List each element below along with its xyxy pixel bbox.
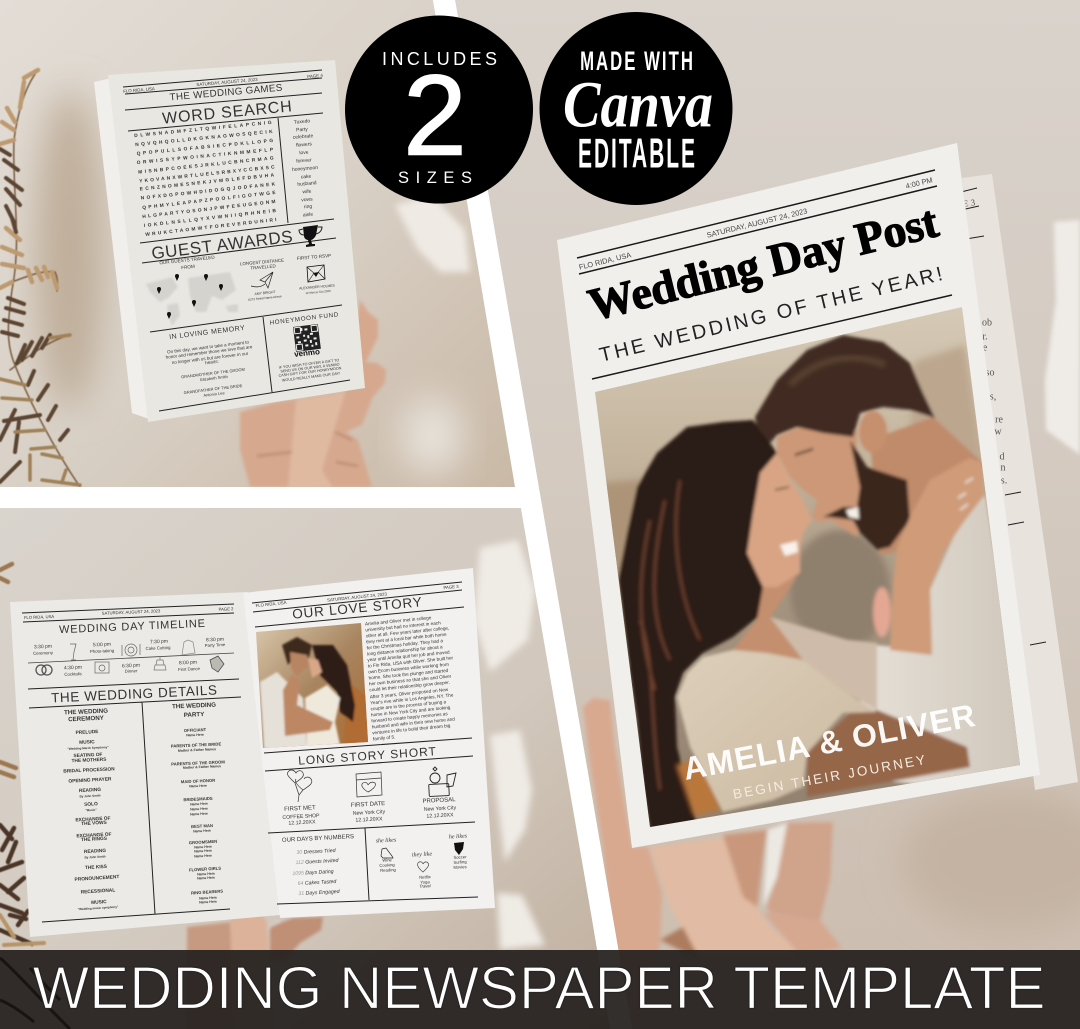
badge: includes 2 sizes — [345, 16, 533, 204]
text block: love story paragraph: home in New York City and are looking — [371, 705, 451, 717]
likes: she likes: Wine — [382, 857, 393, 863]
text block: love story paragraph: Amelia and Oliver met in college — [365, 615, 432, 626]
back page of the newspaper: so — [986, 368, 994, 378]
column: The Wedding Party: RING BEARERS — [191, 889, 223, 895]
column: The Wedding Party: OFFICIANT — [184, 727, 207, 733]
column: The Wedding Ceremony: READING — [84, 848, 106, 855]
text block: love story paragraph: couple are in the process of buying a — [370, 699, 447, 711]
timeline: 5:00 pm — [93, 642, 111, 648]
milestone: first met: 12.12.20XX — [288, 819, 316, 827]
column: The Wedding Ceremony: RECESSIONAL — [80, 887, 116, 896]
award: longest distance: 8273 Street Name Above — [248, 294, 282, 302]
column: The Wedding Ceremony: PRONOUNCEMENT — [74, 874, 120, 883]
newspaper page: The Wedding Games — [94, 60, 365, 422]
panel: top-left photo backdrop — [0, 0, 520, 490]
text block: love story paragraph: university but had no interest in each — [365, 620, 441, 632]
column: The Wedding Party: PARENTS OF THE BRIDE — [171, 741, 221, 749]
text block: love story paragraph: Year's eve while in Los Angeles, NY. The — [370, 692, 454, 705]
text block: In Loving Memory: On this day, we want to take a moment to — [167, 339, 250, 355]
man's ear — [859, 411, 887, 453]
man's shirt — [860, 495, 1030, 790]
list: Our Days By Numbers: 112 Guests Invited — [295, 858, 340, 866]
orange sunlit hair patch — [676, 758, 722, 816]
icon: hearts — [418, 862, 429, 872]
column: The Wedding Party: Name Here — [199, 895, 217, 901]
timeline — [28, 637, 234, 677]
column: The Wedding Party: Name Here — [194, 849, 212, 853]
column: The Wedding Ceremony — [63, 708, 120, 911]
milestone: proposal: 12.12.20XX — [426, 812, 454, 820]
column: The Wedding Ceremony: "Wedding March Symphony" — [67, 745, 109, 751]
timeline: 8:30 pm — [206, 637, 224, 643]
list: Our Days By Numbers: 1095 Days Dating — [292, 869, 334, 877]
milestone: first met: COFFEE SHOP — [282, 813, 320, 821]
milestone: proposal — [422, 767, 457, 820]
column: The Wedding Party: Name Here — [197, 871, 215, 877]
badge: made with Canva, editable: MADE WITH — [580, 46, 693, 76]
award: longest distance: AMY BRIGHT — [254, 290, 276, 296]
masthead: Wedding Day Post: Wedding Day Post — [583, 195, 944, 330]
column: The Wedding Ceremony: THE KISS — [85, 864, 108, 871]
back page of the newspaper: d — [1000, 452, 1004, 462]
hand holding main page — [582, 696, 842, 950]
text block: Honeymoon Fund: venmo — [294, 347, 320, 359]
word list — [292, 118, 318, 218]
text block: Honeymoon Fund: SEND US ON OUR WAY, A VENMO — [280, 362, 340, 374]
word list: flowers — [296, 141, 313, 149]
heading: Wedding Day Timeline: WEDDING DAY TIMELINE — [59, 618, 205, 636]
timeline: Cocktails — [64, 671, 82, 677]
word search grid: WRUKCTAOMWTFOREVERDUNIRI — [145, 217, 278, 238]
newspaper spread: left page (timeline and details) — [10, 592, 280, 937]
word search grid: YKOVANXWRTLUELSRBXYCCBXSC — [139, 164, 275, 185]
photo: couple forehead to forehead — [590, 300, 1030, 840]
icon: high heel — [381, 848, 393, 858]
text block: love story paragraph: own Ecom business while working from — [368, 662, 449, 674]
column: The Wedding Party: BEST MAN — [191, 823, 213, 829]
icon: envelope — [307, 265, 325, 282]
timeline: 6:30 pm — [122, 663, 140, 669]
text block: In Loving Memory: Antonio Lee — [203, 390, 226, 398]
column: The Wedding Party: Name Here — [186, 733, 204, 737]
man's forearm — [807, 710, 970, 797]
text block: In Loving Memory: honor and remember those we love that are — [165, 344, 253, 360]
word search grid: IOKDLNSLLQYXVWNIIQRHNEIB — [144, 208, 277, 229]
hand holding top-left page — [240, 300, 386, 487]
icon: trophy — [299, 225, 322, 247]
column: The Wedding Ceremony: "Music" — [85, 808, 97, 812]
white divider bands — [0, 0, 632, 1029]
timeline: First Dance — [178, 666, 201, 672]
back page of the newspaper: r. — [982, 332, 988, 342]
word list: celebrate — [292, 133, 314, 141]
word search grid: QPOPULLSOFABSIECPDKLLOPG — [136, 138, 274, 157]
column: The Wedding Ceremony: MUSIC — [91, 899, 107, 906]
icon: tuxedo — [454, 842, 464, 855]
column: The Wedding Ceremony: THE MOTHERS — [71, 757, 107, 764]
column: The Wedding Ceremony: READING — [79, 787, 101, 794]
likes: story likes: Netflix — [419, 874, 432, 880]
text block: In Loving Memory: GRANDMOTHER OF THE GROOM — [181, 367, 245, 379]
text block: love story paragraph: forward to create happy memories as — [371, 711, 449, 723]
text block: In Loving Memory: hearts: — [205, 359, 219, 365]
word list: honeymoon — [292, 165, 318, 173]
text block: In Loving Memory — [165, 325, 253, 398]
award: longest distance — [240, 258, 284, 302]
page header: SATURDAY, AUGUST 24, 2023 — [706, 206, 808, 240]
word list: Tuxedo — [294, 118, 311, 126]
word search grid: ECNZNOMESNEKJVMGLEFDBVHA — [140, 172, 275, 193]
page header — [123, 70, 350, 411]
likes: she likes: Cooking — [379, 862, 395, 868]
word list: wife — [302, 189, 312, 195]
text block: love story paragraph: long distance relationship for about a — [367, 644, 443, 656]
back page of the newspaper: s, — [990, 392, 996, 402]
woman's hair — [618, 420, 777, 830]
award: first to RSVP: ALEXANDER HOLMES — [299, 283, 336, 291]
panel: bottom-left photo backdrop — [0, 508, 597, 950]
column: The Wedding Ceremony: THE VOWS — [81, 820, 108, 827]
page header: FLO RIDA, USA — [255, 600, 287, 608]
column: The Wedding Party: Name Here — [190, 812, 208, 816]
heading: The Wedding Details: THE WEDDING DETAILS — [51, 682, 217, 706]
column: The Wedding Party: Mother & Father Names — [183, 764, 221, 770]
photo: couple embracing — [256, 623, 368, 748]
main newspaper front page — [557, 143, 1040, 848]
woman's sweater — [677, 650, 877, 812]
woman's hand and arm — [890, 458, 983, 655]
man's face — [777, 428, 867, 537]
icon: heart balloons — [287, 770, 312, 802]
page header: PAGE 3 — [443, 584, 459, 590]
milestone: first date — [351, 772, 386, 824]
likes: he likes: Movies — [453, 864, 467, 870]
award: longest distance: LONGEST DISTANCE — [240, 258, 284, 266]
milestone: first date: 12.12.20XX — [355, 816, 383, 824]
hand holding spread — [186, 916, 324, 950]
text block: love story paragraph: other at all. Few years later after college, — [366, 625, 449, 638]
column: The Wedding Ceremony: OPENING PRAYER — [68, 776, 112, 785]
text block: love story paragraph: to Flo Rida, USA with Oliver. She built her — [368, 655, 454, 668]
column: The Wedding Party — [171, 702, 225, 905]
woman's blouse — [770, 617, 877, 710]
text block: Honeymoon Fund: IF YOU WISH TO OFFER A GIFT TO — [279, 358, 340, 370]
likes: she likes: she likes — [376, 837, 397, 845]
text block: love story paragraph: home. She took the plunge and started — [368, 668, 449, 680]
badge: includes 2 sizes: 2 — [403, 52, 467, 180]
column: The Wedding Ceremony: THE WEDDING — [64, 708, 108, 716]
column: The Wedding Ceremony: EXCHANGE OF — [75, 816, 111, 823]
likes: story likes: Travel — [419, 883, 432, 889]
footer title: WEDDING NEWSPAPER TEMPLATE — [32, 954, 1046, 1022]
text block: love story paragraph: After 3 years, Oliver proposed on New — [370, 687, 449, 699]
list: Our Days By Numbers: OUR DAYS BY NUMBERS — [282, 834, 354, 844]
likes: story likes: they like — [412, 851, 433, 859]
award: first to RSVP: 12 Mercer Dal 2020 — [305, 289, 331, 295]
plant: dried fern top-left — [0, 70, 80, 487]
text block: Honeymoon Fund — [269, 311, 342, 383]
heading: Long Story Short: LONG STORY SHORT — [298, 744, 437, 768]
fabric edge on the right — [1045, 220, 1080, 455]
list: Our Days By Numbers: 31 Days Engaged — [298, 889, 341, 897]
word search grid: NQVQHQOLLDKGKNAGWOSQECIK — [135, 129, 273, 148]
timeline icons — [36, 640, 224, 675]
text block: love story paragraph: for the Christmas holiday. They had a — [366, 638, 444, 650]
page header — [252, 582, 478, 904]
badge: made with Canva, editable — [540, 12, 732, 205]
award: first to RSVP — [297, 253, 336, 295]
back page of the newspaper: re — [995, 414, 1003, 426]
award: first to RSVP: FIRST TO RSVP — [297, 253, 331, 261]
photo caption: names: AMELIA & OLIVER — [680, 697, 978, 787]
page header: 4:00 PM — [905, 175, 933, 191]
heading: Guest Awards: GUEST AWARDS — [150, 227, 294, 263]
headline: THE WEDDING OF THE YEAR! — [597, 263, 945, 367]
column: The Wedding Ceremony: By John Smith — [79, 793, 101, 799]
timeline: Photo-taking — [90, 648, 115, 654]
page header — [22, 604, 241, 922]
column: The Wedding Ceremony: "Wedding music symphony" — [78, 905, 119, 911]
likes: he likes: Soccer — [453, 854, 467, 860]
text block: In Loving Memory: IN LOVING MEMORY — [169, 325, 245, 341]
milestone: first met — [282, 770, 320, 827]
column: The Wedding Party: PARTY — [184, 711, 205, 719]
world map — [146, 272, 238, 326]
column: The Wedding Ceremony: BRIDAL PROCESSION — [63, 766, 115, 775]
text block: Honeymoon Fund: HONEYMOON FUND — [269, 311, 339, 327]
likes: she likes — [376, 837, 397, 873]
man's hair — [755, 335, 935, 443]
column: The Wedding Ceremony: THE RINGS — [81, 836, 108, 843]
timeline: 8:00 pm — [179, 660, 197, 666]
word search grid: HLGPARTYOSONJPWFEEUGEONM — [142, 199, 276, 220]
column: The Wedding Ceremony: SEATING OF — [73, 752, 103, 759]
word list: aisle — [303, 212, 314, 218]
text block: love story paragraph: family of 5. — [373, 734, 396, 741]
column: The Wedding Party: THE WEDDING — [172, 702, 216, 710]
column: The Wedding Party: Name Here — [193, 829, 211, 833]
award: longest distance: TRAVELLED — [250, 263, 276, 271]
text block: love story paragraph: her own business so that she and Oliver — [369, 674, 452, 686]
list: Our Days By Numbers — [282, 834, 354, 897]
text block: Honeymoon Fund: WOULD REALLY MAKE OUR DAY! — [282, 371, 340, 383]
text block: love story paragraph: year until Amelia quit her job and moved — [367, 650, 450, 662]
text block: love story paragraph: could let their relationship grow deeper. — [369, 680, 450, 692]
milestone: proposal: PROPOSAL — [422, 797, 456, 805]
page header: FLO RIDA, USA — [578, 250, 632, 272]
panel: right photo backdrop — [450, 0, 1080, 1029]
man's neck — [870, 417, 985, 555]
likes: she likes: Reading — [380, 867, 397, 873]
wall and soft backdrop — [907, 344, 988, 568]
badge: includes 2 sizes: SIZES — [398, 169, 472, 187]
column: The Wedding Ceremony: CEREMONY — [68, 715, 105, 723]
pink shoulder patch — [873, 587, 891, 637]
heading: Our Love Story: OUR LOVE STORY — [292, 594, 422, 622]
footer banner — [0, 950, 1080, 1029]
page header: PAGE 4 — [307, 73, 324, 79]
likes: story likes: Yoga — [420, 879, 430, 885]
column: The Wedding Party: Name Here — [190, 807, 208, 811]
page header: SATURDAY, AUGUST 24, 2023 — [102, 608, 161, 616]
word list: forever — [296, 157, 312, 165]
word list: husband — [297, 180, 317, 188]
column: The Wedding Party: PARENTS OF THE GROOM — [171, 759, 225, 767]
woman's neck — [733, 577, 805, 660]
icon: ring box — [429, 767, 456, 797]
page header: FLO RIDA, USA — [24, 614, 54, 620]
text block: In Loving Memory: GRANDFATHER OF THE BRIDE — [183, 383, 243, 395]
column: The Wedding Ceremony: PRELUDE — [75, 729, 99, 736]
word list: love — [299, 150, 309, 156]
text block: love story paragraph: husband and wife in their new home and — [372, 716, 455, 729]
timeline: 3:30 pm — [34, 644, 52, 650]
heading: Word Search: WORD SEARCH — [161, 98, 293, 128]
text block: In Loving Memory: Elizabeth Smith — [200, 374, 228, 382]
column: The Wedding Party: Name Here — [189, 784, 207, 788]
word search grid: ORWISSYPWOINACTIKNMMEFLP — [136, 147, 274, 166]
word search grid — [134, 120, 278, 238]
back page of the newspaper: s. — [1001, 476, 1007, 486]
text block: love story paragraph: they met at a local bar while both home — [366, 632, 447, 644]
heading: The Wedding Games: THE WEDDING GAMES — [169, 83, 283, 103]
text block: In Loving Memory: no longer with us but are forever in our — [171, 351, 249, 365]
woman's face — [747, 453, 812, 587]
torn ribbon: top — [395, 195, 470, 272]
back page of the newspaper: ob — [982, 318, 992, 328]
text block: Honeymoon Fund: CASH GIFT FOR OUR HONEYMOON — [278, 366, 342, 378]
timeline: Dinner — [125, 668, 138, 674]
back page of the newspaper: e — [983, 342, 988, 354]
word search grid: QPHMYLEAPAPZPOOLFIGOTWGE — [142, 190, 277, 211]
word search grid: DLWSNADMFZLTQWIFELAPCNIG — [134, 120, 272, 139]
timeline: Cake Cutting — [145, 645, 171, 651]
plant: dried foliage bottom-left — [0, 564, 44, 945]
torn ribbons: bottom-left — [474, 540, 545, 950]
badge: includes 2 sizes: INCLUDES — [382, 49, 497, 69]
timeline: Party Time — [205, 642, 226, 648]
likes: story likes — [412, 851, 433, 889]
milestone: first met: FIRST MET — [284, 805, 316, 813]
word list: vows — [301, 196, 313, 203]
column: The Wedding Party: Name Here — [194, 845, 212, 849]
milestone: first date: FIRST DATE — [351, 801, 385, 809]
column: The Wedding Ceremony: SOLO — [84, 801, 98, 808]
word list: Party — [296, 126, 309, 133]
back page of the newspaper: w — [994, 426, 1002, 438]
likes: he likes: Surfing — [453, 859, 467, 865]
back page of the newspaper — [961, 174, 1078, 790]
page header: PAGE 2 — [218, 606, 234, 612]
column: The Wedding Party: Name Here — [190, 802, 208, 806]
icon: paper airplane — [251, 272, 273, 288]
column: The Wedding Party: Name Here — [199, 899, 217, 905]
word search grid: MISNBPCOEESJRKLUCBNCRMAG — [138, 155, 274, 176]
word list: ring — [304, 204, 313, 210]
column: The Wedding Ceremony: MUSIC — [79, 739, 95, 746]
milestone: first date: New York City — [353, 809, 386, 817]
timeline: 7:30 pm — [150, 639, 168, 645]
column: The Wedding Party: BRIDESMAIDS — [183, 796, 213, 802]
timeline: 4:30 pm — [64, 665, 82, 671]
back page of the newspaper: E 3 — [962, 197, 976, 209]
text block: love story paragraph — [365, 615, 455, 741]
column: The Wedding Ceremony: By John Smith — [84, 854, 106, 860]
likes: he likes — [449, 833, 468, 870]
text block: love story paragraph: ventures in life to build their dream big — [372, 723, 451, 735]
icon: calendar — [356, 772, 382, 797]
column: The Wedding Ceremony: EXCHANGE OF — [76, 832, 112, 839]
man's beard — [823, 440, 910, 550]
photo caption: tagline: BEGIN THEIR JOURNEY — [732, 752, 926, 802]
newspaper spread: right page (love story) — [243, 568, 495, 918]
list: Our Days By Numbers: 64 Cakes Tasted — [297, 879, 338, 887]
award: guests traveled: OUR GUESTS TRAVELED — [159, 255, 216, 265]
column: The Wedding Party: MAID OF HONOR — [181, 778, 215, 784]
column: The Wedding Party: GROOMSMEN — [189, 839, 217, 845]
award: guests traveled — [146, 255, 238, 326]
QR code — [293, 324, 321, 352]
word search grid: NOFXDGPOWHDIDOGQJODFANEK — [141, 181, 276, 202]
column: The Wedding Party: Mother & Father Names — [178, 747, 216, 753]
page header — [577, 170, 952, 379]
map pins — [157, 274, 223, 319]
milestone: proposal: New York City — [424, 805, 457, 813]
back page of the newspaper: n — [1000, 462, 1006, 474]
page header: SATURDAY, AUGUST 24, 2023 — [196, 77, 258, 87]
timeline: Ceremony — [33, 650, 54, 656]
column: The Wedding Party: FLOWER GIRLS — [189, 866, 221, 872]
award: guests traveled: FROM — [181, 264, 195, 270]
column: The Wedding Party: Name Here — [194, 854, 212, 858]
word list: cake — [300, 174, 312, 180]
badge: made with Canva, editable: EDITABLE — [578, 131, 695, 177]
badge: made with Canva, editable: Canva — [563, 68, 713, 142]
list: Our Days By Numbers: 30 Dresses Tried — [296, 848, 337, 856]
column: The Wedding Party: Name Here — [197, 875, 215, 881]
likes: he likes: he likes — [449, 833, 468, 840]
page header: FLO RIDA, USA — [123, 86, 155, 94]
page header: SATURDAY, AUGUST 24, 2023 — [327, 591, 388, 603]
